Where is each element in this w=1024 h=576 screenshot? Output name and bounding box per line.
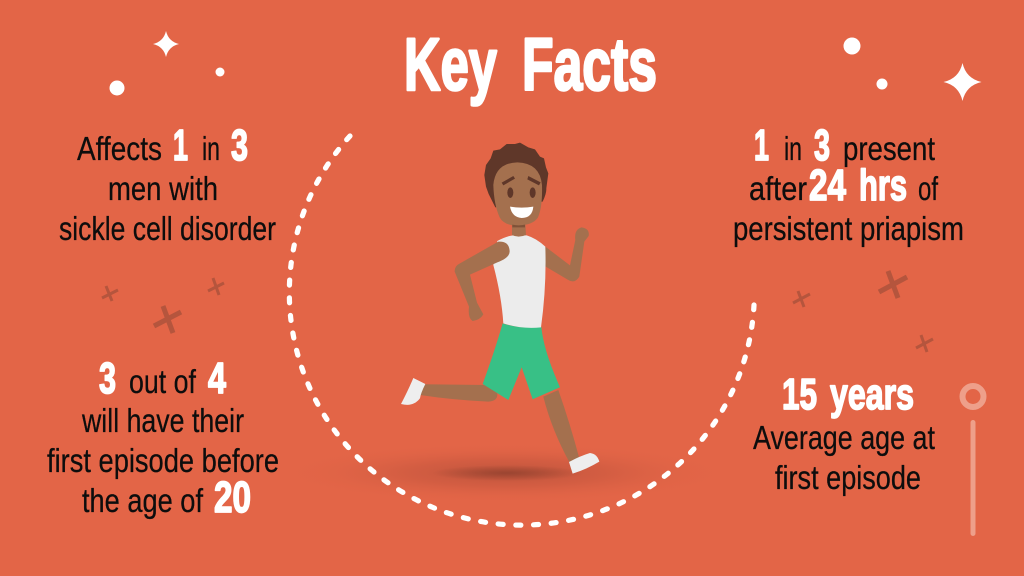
- eyes and brows: [502, 176, 541, 198]
- ground shadow: [280, 443, 730, 503]
- text: affects 1 in 3: [59, 121, 276, 247]
- neck shadow: [512, 225, 525, 227]
- text: 3 out of 4: 20: [214, 473, 251, 522]
- face: [493, 162, 542, 226]
- dashed arc: [289, 136, 754, 525]
- text: 1 in 3 present: of: [918, 170, 939, 207]
- text: 1 in 3 present: present: [843, 130, 935, 167]
- text: affects 1 in 3: in: [202, 130, 220, 167]
- far arm: [545, 227, 589, 281]
- icons: left crosses: [102, 278, 224, 333]
- text: 1 in 3 present: 24: [809, 161, 846, 210]
- text: 3 out of 4: out of: [129, 363, 197, 400]
- icons: right sparkles and dots: [844, 38, 982, 101]
- title: Key: [404, 23, 497, 106]
- smile: [510, 207, 533, 218]
- text: 3 out of 4: will have their: [81, 402, 244, 439]
- front shoe: [569, 453, 599, 474]
- near arm: [455, 242, 510, 321]
- text: affects 1 in 3: men with: [108, 170, 218, 207]
- text: affects 1 in 3: Affects: [77, 130, 162, 167]
- text: 15 years: years: [830, 370, 914, 419]
- text: 1 in 3 present: hrs: [859, 161, 907, 210]
- text: 3 out of 4: the age of: [82, 482, 204, 519]
- torso: [493, 235, 546, 328]
- text: affects 1 in 3: 3: [231, 121, 248, 170]
- text: 3 out of 4: 4: [208, 354, 226, 403]
- text: 3 out of 4: [47, 354, 279, 522]
- runner figure: [401, 143, 599, 474]
- back leg: [420, 384, 497, 402]
- title: [404, 23, 657, 106]
- text: 15 years: [753, 370, 935, 496]
- text: affects 1 in 3: sickle cell disorder: [59, 210, 276, 247]
- text: 3 out of 4: first episode before: [47, 442, 279, 479]
- shorts: [483, 323, 560, 400]
- neck: [512, 223, 526, 237]
- text: 1 in 3 present: 1: [754, 121, 769, 170]
- text: 1 in 3 present: in: [784, 130, 802, 167]
- text: 1 in 3 present: persistent priapism: [733, 210, 964, 247]
- text: affects 1 in 3: 1: [173, 121, 188, 170]
- title: Facts: [522, 23, 657, 106]
- text: 3 out of 4: 3: [99, 354, 116, 403]
- back shoe: [401, 378, 425, 405]
- text: 15 years: 15: [782, 370, 817, 419]
- text: 1 in 3 present: after: [749, 170, 807, 207]
- text: 1 in 3 present: 3: [814, 121, 830, 170]
- text: 15 years: first episode: [775, 459, 921, 496]
- text: 15 years: Average age at: [753, 419, 935, 456]
- front leg: [543, 390, 579, 463]
- icons: right crosses: [793, 271, 933, 352]
- hair: [484, 143, 548, 207]
- text: 1 in 3 present: [733, 121, 964, 247]
- icons: left sparkles and dots: [110, 31, 224, 96]
- icon: ring and vertical bar: [962, 386, 984, 534]
